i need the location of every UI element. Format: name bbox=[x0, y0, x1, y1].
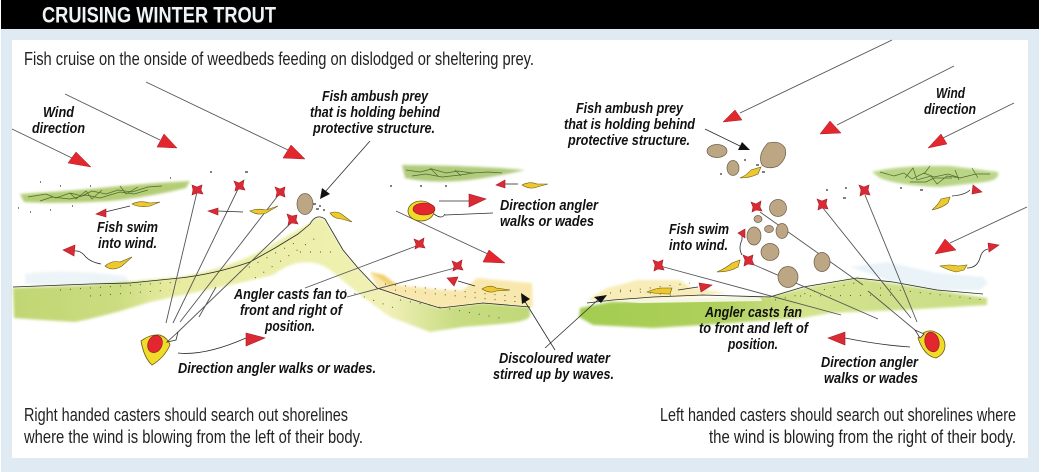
note: left handed casters bbox=[660, 405, 1016, 447]
label: direction angler right bbox=[821, 354, 919, 387]
intro text: Fish cruise on the onside of weedbeds feeding on dislodged or sheltering prey. bbox=[24, 49, 534, 69]
middle weedbed bbox=[402, 165, 525, 182]
label: angler casts left bbox=[233, 286, 347, 335]
label: fish swim right: into wind. bbox=[669, 237, 728, 254]
label: fish ambush left: protective structure. bbox=[312, 120, 435, 137]
label: discoloured water: stirred up by waves. bbox=[493, 366, 614, 383]
label: fish ambush left: Fish ambush prey bbox=[322, 88, 429, 105]
black pointer arrows bbox=[320, 129, 750, 350]
label: fish swim left: Fish swim bbox=[97, 219, 158, 236]
label: discoloured water bbox=[493, 350, 614, 383]
label: fish swim right: Fish swim bbox=[669, 221, 729, 238]
left scene: shoreline bbox=[13, 217, 533, 332]
rocks bbox=[297, 142, 830, 288]
label: angler casts right: Angler casts fan bbox=[704, 304, 802, 321]
label: wind direction left: Wind bbox=[43, 104, 75, 121]
label: angler casts left: position. bbox=[264, 318, 315, 335]
cast lines right bbox=[660, 195, 917, 330]
label: direction angler right: Direction angler bbox=[821, 354, 919, 371]
label: fish ambush left: that is holding behind bbox=[310, 104, 441, 121]
label: wind direction right: Wind bbox=[936, 85, 966, 102]
label: direction angler middle bbox=[500, 197, 599, 230]
right weedbed bbox=[872, 166, 998, 187]
label: fish swim left: into wind. bbox=[98, 235, 157, 252]
label: direction angler right: walks or wades bbox=[824, 370, 918, 387]
angler right bbox=[915, 330, 945, 358]
target stars bbox=[192, 180, 870, 271]
label: angler casts left: Angler casts fan to bbox=[233, 286, 347, 303]
angler middle bbox=[408, 201, 445, 221]
label: angler casts right bbox=[699, 304, 810, 353]
label: direction angler left: Direction angler walks or wades. bbox=[178, 360, 376, 377]
wind arrows right bbox=[723, 40, 1027, 254]
angler left bbox=[141, 332, 178, 365]
label: wind direction left bbox=[32, 104, 85, 137]
left weedbed bbox=[18, 178, 190, 212]
label: discoloured water: Discoloured water bbox=[499, 350, 611, 367]
note: right handed casters: Right handed casters should search out shorelines bbox=[24, 405, 348, 425]
label: fish swim left bbox=[97, 219, 158, 252]
label: fish ambush right: that is holding behind bbox=[564, 116, 696, 133]
label: fish swim right bbox=[669, 221, 729, 254]
label: angler casts right: position. bbox=[727, 336, 778, 353]
label: fish ambush right bbox=[564, 100, 696, 149]
label: angler casts left: front and right of bbox=[240, 302, 344, 319]
direction arrows bbox=[178, 194, 910, 353]
label: fish ambush right: Fish ambush prey bbox=[576, 100, 684, 117]
fish and swim arrows bbox=[63, 167, 999, 294]
right scene: shoreline bbox=[579, 262, 988, 328]
label: direction angler middle: Direction angler bbox=[500, 197, 599, 214]
label: direction angler middle: walks or wades bbox=[500, 213, 594, 230]
header bar bbox=[1, 0, 1039, 29]
label: fish ambush right: protective structure. bbox=[567, 132, 690, 149]
label: wind direction right bbox=[924, 85, 976, 118]
prey specks bbox=[210, 160, 923, 210]
note: right handed casters: where the wind is blowing from the left of their body. bbox=[23, 427, 363, 447]
label: angler casts right: to front and left of bbox=[699, 320, 810, 337]
label: fish ambush left bbox=[310, 88, 441, 137]
cast lines left bbox=[166, 187, 455, 332]
note: right handed casters bbox=[23, 405, 363, 447]
label: wind direction right: direction bbox=[924, 101, 976, 118]
title: CRUISING WINTER TROUT bbox=[42, 2, 276, 28]
wind arrows left bbox=[12, 82, 505, 263]
label: wind direction left: direction bbox=[32, 120, 85, 137]
